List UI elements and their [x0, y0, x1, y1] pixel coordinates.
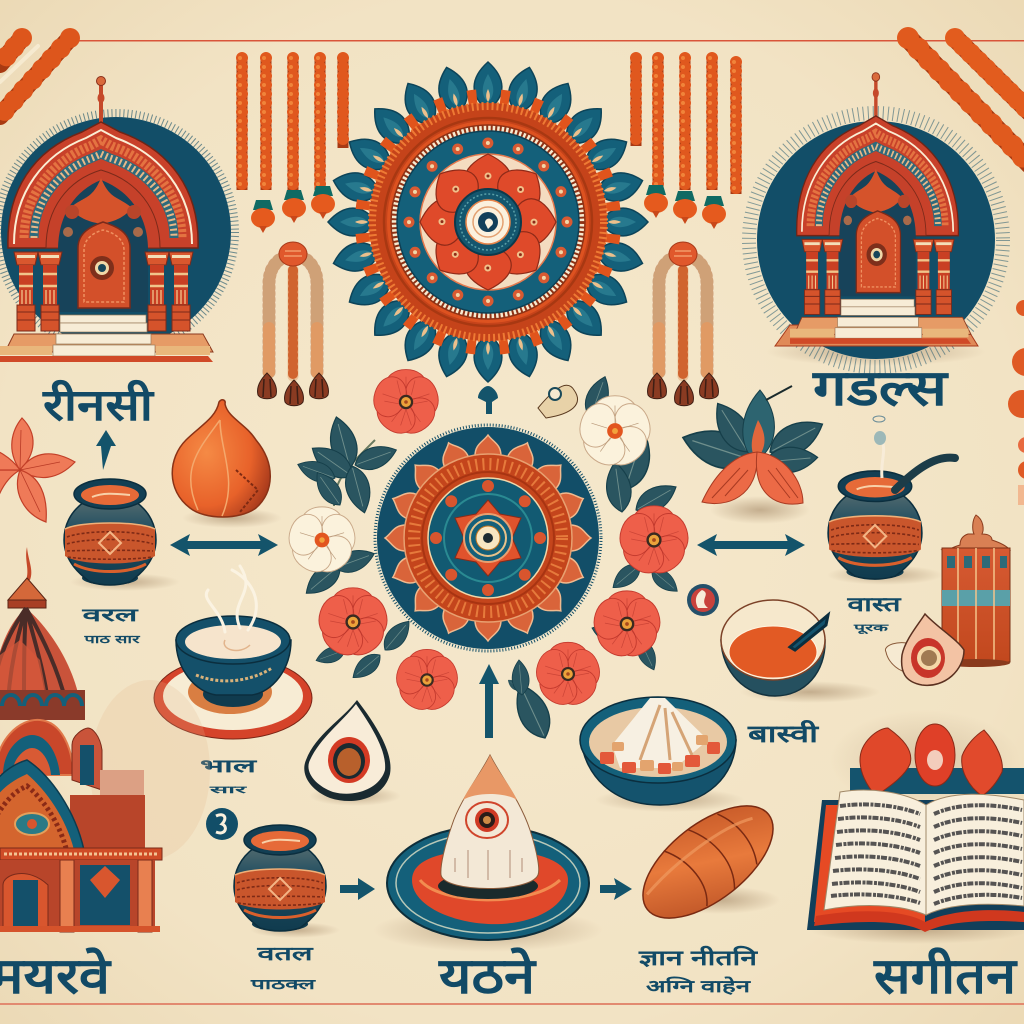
white flower left — [284, 507, 378, 601]
top border line — [78, 40, 1024, 42]
label: bottom sweet: अग्नि वाहेन — [646, 976, 751, 996]
temple: lower left — [0, 547, 210, 932]
arrow to sweet — [600, 878, 632, 900]
red flower right — [608, 506, 693, 597]
up arrow below central mandala — [479, 664, 499, 738]
small arrow below main mandala — [478, 386, 498, 414]
label: bottom pot: वतल — [256, 944, 314, 965]
pot bottom — [234, 825, 340, 938]
bud and white flower upper right — [538, 373, 682, 520]
badge right — [687, 584, 719, 616]
orange flower left — [314, 588, 416, 684]
temple: top right — [749, 73, 1003, 367]
heading left: top: रीनसी — [42, 379, 155, 430]
central mandala — [375, 425, 601, 651]
onion shaped fruit — [172, 400, 282, 528]
hanging strands right — [636, 56, 736, 229]
label: center bottom heading: यठने — [438, 947, 538, 1004]
label: food bowl: बास्वी — [747, 720, 819, 748]
label: bottom pot — [249, 944, 316, 992]
label: bottom pot: पाठक्ल — [249, 976, 316, 992]
main mandala — [328, 62, 648, 382]
open book — [807, 790, 1024, 944]
pot left — [64, 479, 180, 591]
steaming bowl on saucer — [154, 566, 312, 739]
label: sauce bowl: वास्त — [846, 594, 903, 616]
copper jar — [942, 515, 1010, 667]
garland: top left — [0, 38, 70, 116]
label: bowl: सार — [207, 785, 248, 796]
double arrow left — [170, 534, 278, 556]
label: bottom sweet — [638, 945, 759, 996]
label: sauce bowl: पूरक — [852, 623, 891, 635]
label: pot left: वरल — [81, 605, 139, 625]
fruit row above book — [830, 710, 1024, 810]
leaf flower right — [678, 386, 829, 524]
up-down arrow left — [96, 430, 116, 470]
flower left edge — [0, 418, 75, 522]
heading right: गडल्स — [812, 360, 950, 416]
bottom border line — [0, 1003, 1024, 1005]
flower and leaves cluster: upper left — [295, 370, 443, 516]
pot with spoon right — [827, 431, 955, 585]
white garland right — [648, 242, 718, 406]
numbered badge left — [206, 808, 238, 840]
leaves beside up arrow — [506, 659, 558, 744]
label: pot left — [81, 605, 140, 646]
orange flower lower right — [589, 591, 665, 673]
arrow to plate — [340, 878, 375, 900]
shell offering — [885, 614, 964, 685]
double arrow right — [697, 534, 805, 556]
label: sauce bowl — [846, 594, 903, 635]
food bowl — [580, 697, 745, 812]
offering cone on plate — [373, 755, 603, 952]
small mark under right heading — [873, 416, 885, 422]
red flower bottom right — [532, 642, 604, 711]
label: bowl — [200, 756, 257, 796]
red flower lower left — [392, 649, 462, 716]
temple: top left — [0, 76, 235, 362]
elongated sweet — [624, 785, 792, 939]
label: heading bottom right: सगीतन — [873, 947, 1018, 1004]
label: bottom sweet: ज्ञान नीतनि — [638, 945, 759, 970]
partial flowers right edge — [1008, 300, 1024, 505]
label: bowl: भाल — [200, 756, 257, 776]
hanging strands left — [240, 56, 343, 233]
label: pot left: पाठ सार — [83, 634, 140, 646]
white garland left — [258, 242, 328, 406]
garland: top right — [908, 38, 1024, 164]
teardrop fruit — [304, 700, 401, 806]
orange sauce bowl — [721, 600, 880, 703]
